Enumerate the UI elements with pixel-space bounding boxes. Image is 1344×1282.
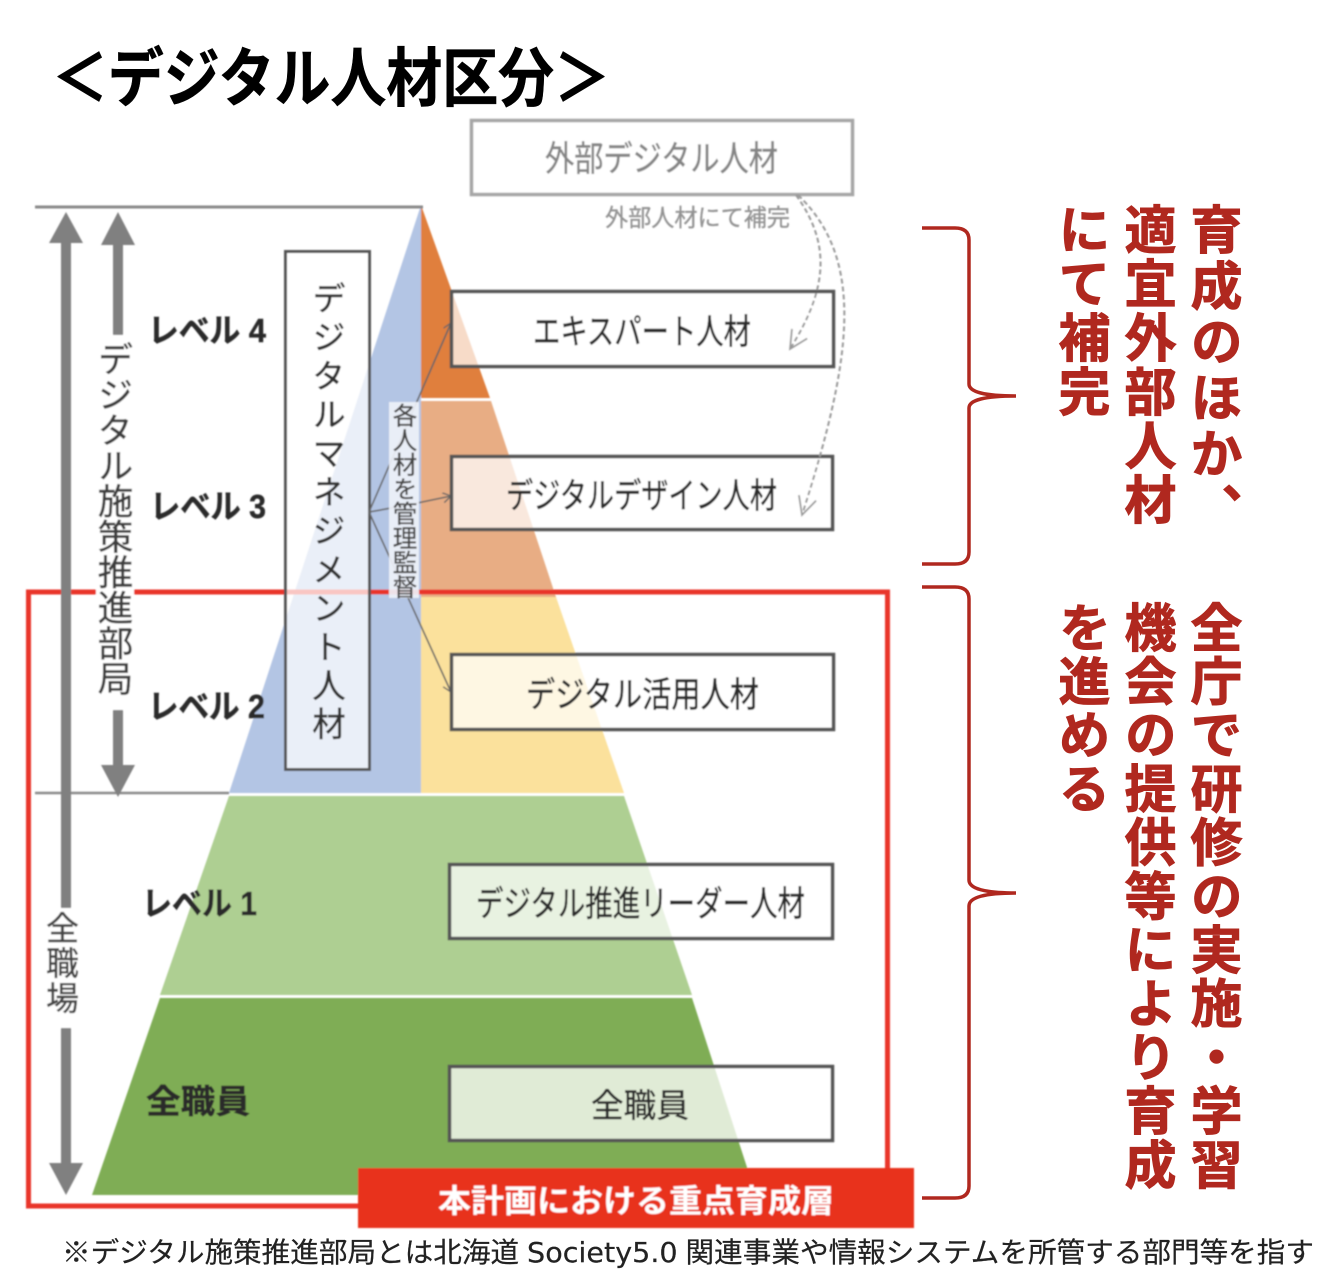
label: manage and supervise each personnel: 各人材を管理監督 [390, 403, 417, 599]
bracket: upper [922, 228, 1016, 564]
pyramid diagram [28, 120, 914, 1228]
box: digital design personnel [452, 456, 832, 530]
pyramid: level 3 light orange tier [421, 401, 556, 597]
arrow: digital policy department [101, 212, 135, 797]
red text: upper note: 適宜外部人材 [1116, 203, 1176, 527]
box: digital promotion leader personnel [450, 864, 832, 938]
box: digital utilization personnel [452, 654, 834, 730]
banner: priority development layer [358, 1168, 914, 1228]
top guide line [35, 206, 423, 208]
banner: priority development layer: 本計画における重点育成層 [438, 1183, 834, 1219]
label: all staff: 全職員 [146, 1083, 250, 1120]
red text: lower note: 機会の提供等により育成 [1116, 601, 1176, 1192]
footnote: ※デジタル施策推進部局とは北海道 Society5.0 関連事業や情報システムを所管する部門等を指す [62, 1236, 1314, 1269]
box: expert personnel: エキスパート人材 [533, 313, 751, 352]
level 2 guide line [35, 792, 229, 794]
label: supplemented by external personnel: 外部人材にて補完 [605, 205, 790, 232]
label: digital policy department: デジタル施策推進部局 [93, 341, 133, 696]
label: level 2: レベル 2 [148, 688, 265, 725]
box: all staff [450, 1066, 832, 1140]
box: expert personnel [452, 292, 834, 366]
label: level 1: レベル 1 [142, 885, 257, 922]
box: all staff: 全職員 [591, 1087, 689, 1124]
label: all workplaces: 全職場 [42, 911, 78, 1016]
pyramid: level 4 orange tier [421, 205, 490, 398]
red text: upper note [1050, 203, 1241, 539]
box: digital promotion leader personnel: デジタル推進リーダー人材 [476, 885, 805, 924]
level labels [142, 312, 267, 1120]
red text: lower note [1050, 601, 1242, 1192]
title: ＜デジタル人材区分＞ [52, 43, 610, 115]
red frame: priority layer [28, 592, 888, 1206]
box: digital management personnel: デジタルマネジメント人材 [306, 281, 345, 745]
box: external digital personnel: 外部デジタル人材 [545, 140, 778, 179]
dashed arrows from external personnel [790, 195, 844, 515]
pyramid: level 2 yellow tier [421, 597, 624, 793]
label: level 3: レベル 3 [150, 488, 266, 525]
pyramid: level 1 light green tier [160, 796, 692, 995]
box: digital design personnel: デジタルデザイン人材 [506, 477, 777, 516]
pyramid: digital management blue tier [229, 205, 421, 793]
red text: lower note: を進める [1050, 601, 1109, 816]
box: digital management personnel [286, 252, 370, 770]
pyramid: all staff green tier [92, 998, 756, 1195]
arrow: all workplaces [49, 212, 83, 1195]
bracket: lower [922, 587, 1016, 1198]
box: digital utilization personnel: デジタル活用人材 [526, 676, 759, 715]
red text: upper note: 育成のほか、 [1182, 203, 1241, 539]
box: external digital personnel [472, 120, 852, 194]
management arrows [369, 323, 451, 692]
red text: upper note: にて補完 [1050, 203, 1110, 419]
label: level 4: レベル 4 [148, 312, 267, 349]
red text: lower note: 全庁で研修の実施・学習 [1182, 601, 1242, 1192]
